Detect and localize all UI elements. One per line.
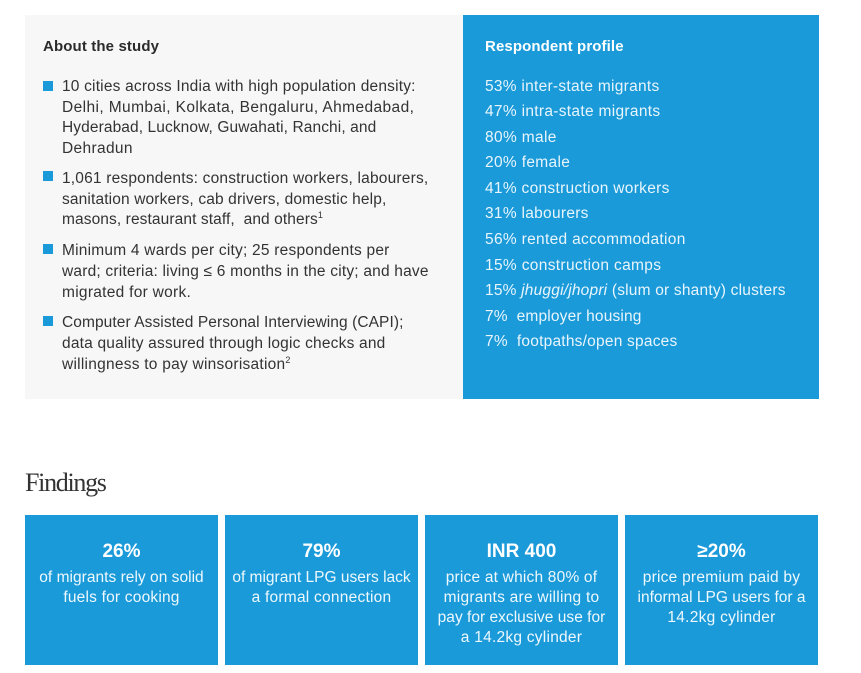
card: 20% price premium: ≥20% [697,541,746,562]
text block: respondent statistics: 31% labourers [485,205,589,222]
panel: about the study [25,15,463,399]
text block: study details [43,78,429,373]
card: INR 400 willingness to pay: INR 400 [487,541,556,562]
card: 26% solid fuels: fuels for cooking [63,589,180,606]
text block: study details: 10 cities across India with high population density: [62,78,416,95]
text block: respondent statistics: 20% female [485,154,570,171]
text block: study details: Minimum 4 wards per city; 25 respondents per [62,242,390,259]
card: 79% no formal connection [225,515,418,665]
card: 26% solid fuels: 26% [102,541,141,562]
text block: respondent statistics: 7% footpaths/open spaces [485,333,678,350]
text block: study details: data quality assured through logic checks and [62,335,386,352]
text block: respondent statistics [485,78,786,350]
card: INR 400 willingness to pay: pay for exclusive use for [438,609,605,626]
heading: about the study: About the study [43,38,159,55]
text block: study details: Computer Assisted Personal Interviewing (CAPI); [62,314,403,331]
text block: study details: ward; criteria: living ≤ 6 months in the city; and have [62,263,429,280]
card: INR 400 willingness to pay: price at which 80% of [446,569,597,586]
card: 79% no formal connection: 79% [302,541,341,562]
text block: study details: Dehradun [62,140,133,157]
text block: respondent statistics: 47% intra-state migrants [485,103,660,120]
card: 79% no formal connection: of migrant LPG users lack [232,569,411,586]
text block: study details: Delhi, Mumbai, Kolkata, Bengaluru, Ahmedabad, [62,99,414,116]
text block: study details: Hyderabad, Lucknow, Guwahati, Ranchi, and [62,119,376,136]
text block: respondent statistics: 7% employer housing [485,308,642,325]
text block: respondent statistics: 53% inter-state migrants [485,78,659,95]
text block: respondent statistics: 15% jhuggi/jhopri (slum or shanty) clusters [485,282,786,299]
text block: study details: masons, restaurant staff, and others1 [62,210,323,228]
text block: study details: migrated for work. [62,284,191,301]
card: 20% price premium [625,515,818,665]
text block: study details: sanitation workers, cab drivers, domestic help, [62,191,386,208]
card: 20% price premium: price premium paid by [643,569,800,586]
text block: respondent statistics: 15% construction camps [485,257,661,274]
text block: study details: 1,061 respondents: construction workers, labourers, [62,170,428,187]
heading: respondent profile: Respondent profile [485,38,624,55]
text block: study details: willingness to pay winsorisation2 [62,355,291,373]
card: 26% solid fuels: of migrants rely on solid [39,569,204,586]
card: INR 400 willingness to pay: a 14.2kg cylinder [461,629,582,646]
card: 20% price premium: informal LPG users for a [638,589,805,606]
card: 20% price premium: 14.2kg cylinder [667,609,776,626]
text block: respondent statistics: 80% male [485,129,557,146]
card: 26% solid fuels [25,515,218,665]
card: INR 400 willingness to pay [425,515,618,665]
panel: respondent profile [463,15,819,399]
text block: respondent statistics: 56% rented accommodation [485,231,686,248]
card: 79% no formal connection: a formal connection [252,589,391,606]
text block: respondent statistics: 41% construction workers [485,180,670,197]
heading: findings: Findings [25,468,106,497]
card: INR 400 willingness to pay: migrants are willing to [444,589,599,606]
